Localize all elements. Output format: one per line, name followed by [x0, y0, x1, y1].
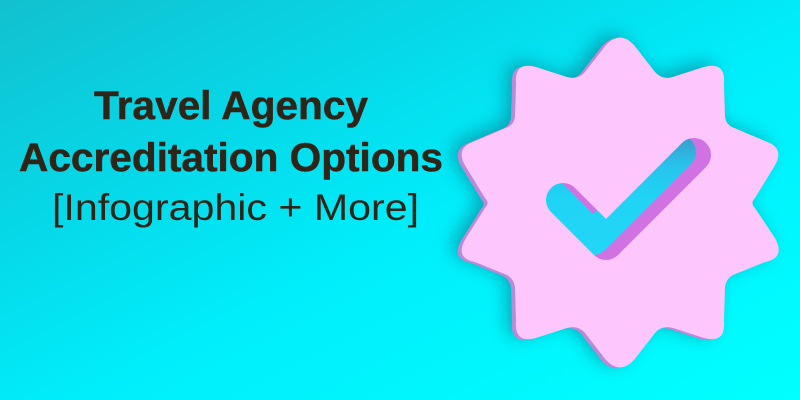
check mark inner wall [561, 138, 711, 260]
heading line 2: Accreditation Options [19, 136, 443, 180]
heading line 1: Travel Agency [94, 84, 369, 128]
icon: check mark cut-out [546, 138, 711, 260]
badge shadow [453, 34, 770, 364]
title text [19, 84, 443, 228]
subheading: [Infographic + More] [52, 187, 419, 228]
badge face [462, 38, 779, 368]
icon: verification badge [453, 34, 779, 368]
badge side wall [458, 38, 775, 368]
check mark opening [553, 152, 679, 238]
